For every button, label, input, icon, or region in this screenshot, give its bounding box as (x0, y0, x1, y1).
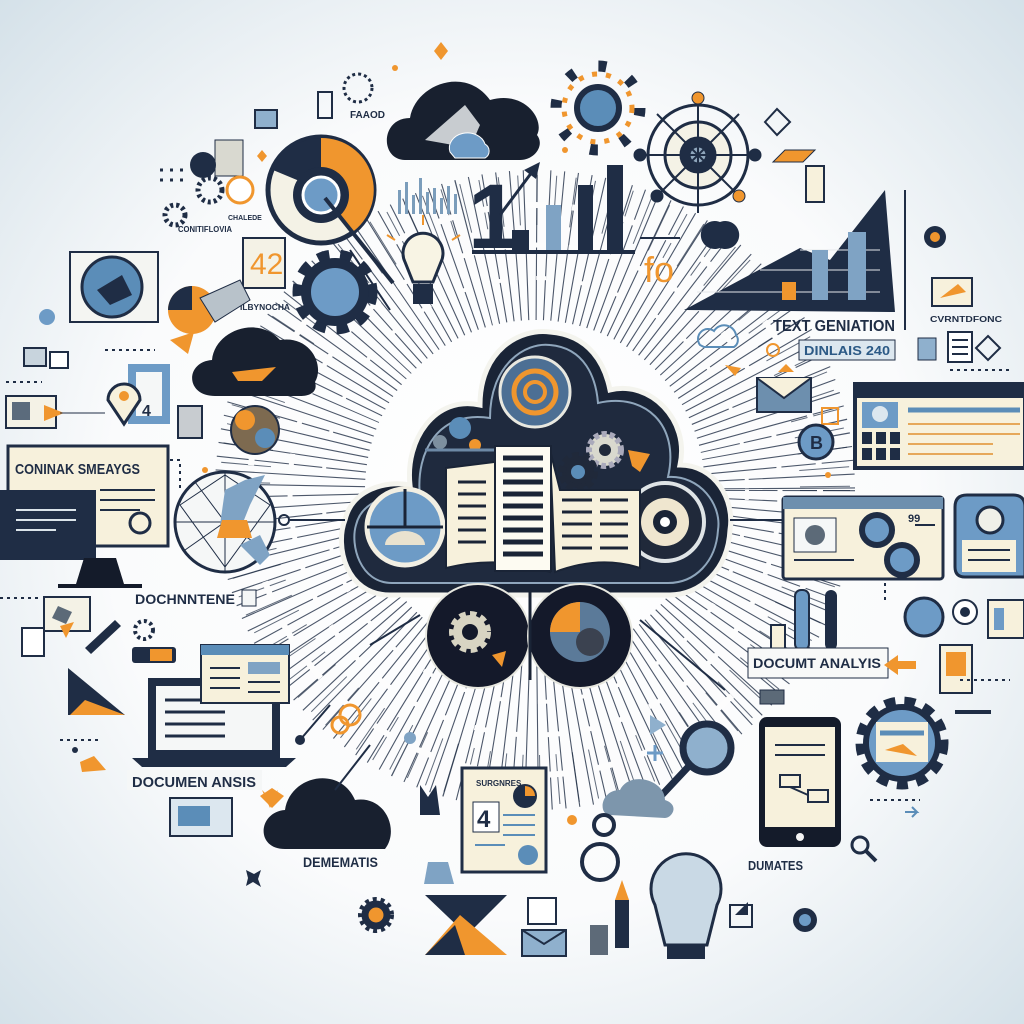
left cloud icon (192, 327, 318, 396)
cylinder bars (765, 590, 855, 650)
connector lines (279, 238, 782, 690)
mountain chart panel (684, 190, 905, 330)
phone document (759, 717, 841, 847)
dumates label (730, 807, 917, 932)
dotted circuit accents (0, 350, 1010, 800)
document overlay (201, 645, 289, 703)
orange target icon (500, 357, 570, 427)
document analysis label right: DOCUMT ANALYIS (753, 655, 881, 671)
location pin and card (108, 364, 170, 424)
orange text fo: fo (644, 249, 674, 290)
location pin and card: 4 (142, 403, 151, 420)
orange arrow and tablet (760, 645, 991, 714)
main bar chart: 1 (468, 166, 519, 268)
b badge: B (810, 433, 823, 453)
laptop with document (132, 645, 296, 767)
blue globe card (70, 252, 158, 322)
text generation label: DINLAIS 240 (804, 343, 890, 358)
dochnntene label: DOCHNNTENE (135, 592, 235, 607)
virus network icon (556, 66, 640, 150)
lower twin circles (426, 584, 632, 688)
top right small icons (701, 109, 824, 249)
document analysis label left: DOCUMEN ANSIS (132, 774, 256, 791)
left lower icons (22, 597, 176, 663)
open book (446, 446, 640, 572)
panel: central cloud (341, 332, 731, 595)
panel: content summary card (0, 446, 168, 588)
mid bottom small icons (295, 705, 454, 884)
main bar chart (468, 162, 635, 268)
document card with number 4 (462, 768, 546, 872)
b badge (799, 425, 833, 459)
small left icons (6, 309, 105, 428)
lower left icons (72, 747, 278, 887)
dochnntene label (135, 590, 256, 607)
right lens disc (626, 483, 704, 561)
magnifier (647, 715, 731, 797)
right circular icons (905, 598, 1024, 638)
bottom left cloud (264, 745, 391, 870)
panel: browser window (855, 384, 1024, 468)
small gear bottom (360, 899, 392, 931)
orange 42 card: 42 (250, 248, 283, 281)
gear icon (297, 254, 373, 330)
gear icons (562, 434, 650, 488)
monitor (0, 490, 142, 588)
panel: content summary card: CONINAK SMEAYGS (15, 461, 140, 478)
document analysis label right (748, 648, 888, 678)
panel: report with lenses: 99 (908, 513, 920, 525)
cloud with pencil group (567, 779, 674, 880)
small cloud icons right (698, 325, 779, 376)
small faq icon and label (255, 74, 385, 128)
mid left object cluster (178, 406, 279, 454)
orange accent sparks (202, 42, 831, 808)
right small icons: CVRNTDFONC (930, 315, 1002, 324)
left upper icons: CONITIFLOVIA (178, 225, 232, 234)
right small icons (918, 226, 1002, 362)
pie and tags icon (168, 280, 250, 354)
orange 42 card: ILBYNOCHA (240, 302, 290, 312)
panel: report with lenses (783, 497, 943, 579)
envelope tiles bottom (425, 895, 608, 956)
dumates label: DUMATES (748, 858, 803, 873)
top cloud icon (387, 82, 540, 160)
pen icon (615, 880, 629, 948)
left upper icons: CHALEDE (228, 215, 262, 222)
network wheel icon (634, 92, 761, 213)
light bulb icon (387, 215, 460, 304)
document card with number 4: 4 (477, 806, 491, 833)
gauge dial (268, 137, 393, 283)
text generation label (773, 318, 895, 360)
small cluster icons (425, 417, 495, 451)
mini bar chart (398, 178, 457, 214)
orange 42 card (240, 238, 290, 312)
gear analysis icon (860, 701, 944, 785)
speech bubble card (955, 495, 1024, 577)
text generation label: TEXT GENIATION (773, 318, 895, 335)
orange triangle tile (68, 668, 125, 715)
bottom light bulb (651, 854, 721, 959)
left blue disc (367, 489, 443, 565)
bottom left cloud: DEMEMATIS (303, 854, 378, 870)
wireframe globe (175, 472, 275, 572)
envelope icon right (757, 364, 838, 424)
document card with number 4: SURGNRES (476, 779, 522, 788)
small faq icon and label: FAAOD (350, 110, 385, 121)
left upper icons (160, 140, 262, 234)
radial rays (245, 200, 825, 780)
